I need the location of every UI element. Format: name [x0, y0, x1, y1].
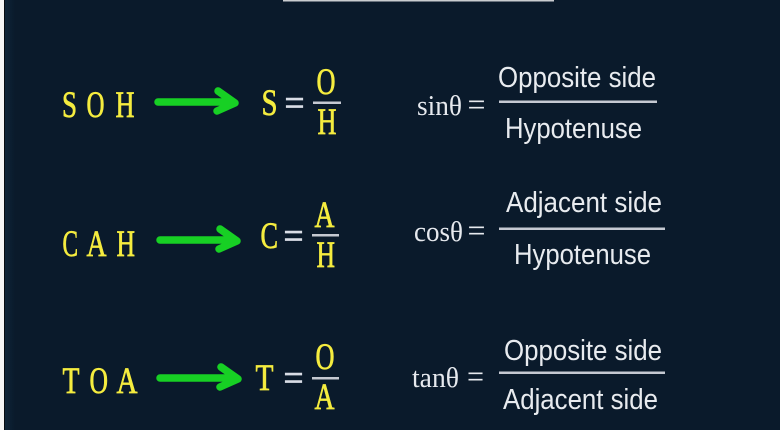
formula: C = A/H: H [316, 235, 335, 276]
mnemonic: SOH: H [116, 85, 134, 126]
formula: cosine: = [468, 212, 486, 248]
formula: S = O/H: O [316, 62, 336, 103]
arrow: CAH [160, 229, 237, 249]
formula: tangent: Adjacent side [503, 384, 658, 416]
formula: T = O/A [256, 337, 339, 418]
formula: tangent: Opposite side [504, 335, 662, 367]
row: TOA [62, 335, 665, 418]
formula: cosine: cosθ [414, 216, 463, 248]
formula: sine: = [468, 86, 486, 122]
mnemonic: TOA: A [116, 361, 138, 402]
mnemonic: SOH: O [86, 85, 104, 126]
formula: tangent [412, 335, 665, 416]
mnemonic: TOA: T [62, 361, 80, 402]
mnemonic: SOH: S [62, 85, 77, 126]
formula: tangent: tanθ [412, 362, 459, 394]
mnemonic: CAH: C [62, 224, 78, 265]
mnemonic: CAH: A [86, 224, 107, 265]
formula: C = A/H: A [314, 195, 335, 236]
arrow: SOH [158, 91, 235, 111]
mnemonic: SOH [62, 85, 134, 126]
mnemonic: CAH: H [116, 224, 135, 265]
formula: sine: sinθ [417, 90, 462, 122]
formula: S = O/H: = [284, 83, 304, 124]
mnemonic: TOA: O [90, 361, 108, 402]
formula: C = A/H [260, 195, 339, 276]
formula: S = O/H: S [262, 83, 278, 124]
mnemonic: CAH [62, 224, 135, 265]
formula: tangent: = [467, 358, 484, 394]
formula: cosine [414, 187, 665, 271]
formula: sine: Opposite side [498, 62, 656, 94]
mnemonic: TOA [62, 361, 138, 402]
formula: T = O/A: T [256, 358, 274, 399]
formula: T = O/A: A [314, 377, 335, 418]
formula: T = O/A: = [284, 358, 304, 399]
row: SOH [62, 62, 657, 145]
arrow: TOA [160, 367, 238, 387]
formula: sine: Hypotenuse [505, 113, 642, 145]
formula: sine [417, 62, 657, 145]
row: CAH [62, 187, 665, 276]
formula: cosine: Hypotenuse [514, 239, 651, 271]
formula: T = O/A: O [316, 337, 334, 378]
formula: C = A/H: = [284, 216, 304, 257]
formula: C = A/H: C [260, 216, 278, 257]
formula: S = O/H: H [318, 102, 336, 143]
formula: S = O/H [262, 62, 341, 143]
formula: cosine: Adjacent side [506, 187, 662, 219]
